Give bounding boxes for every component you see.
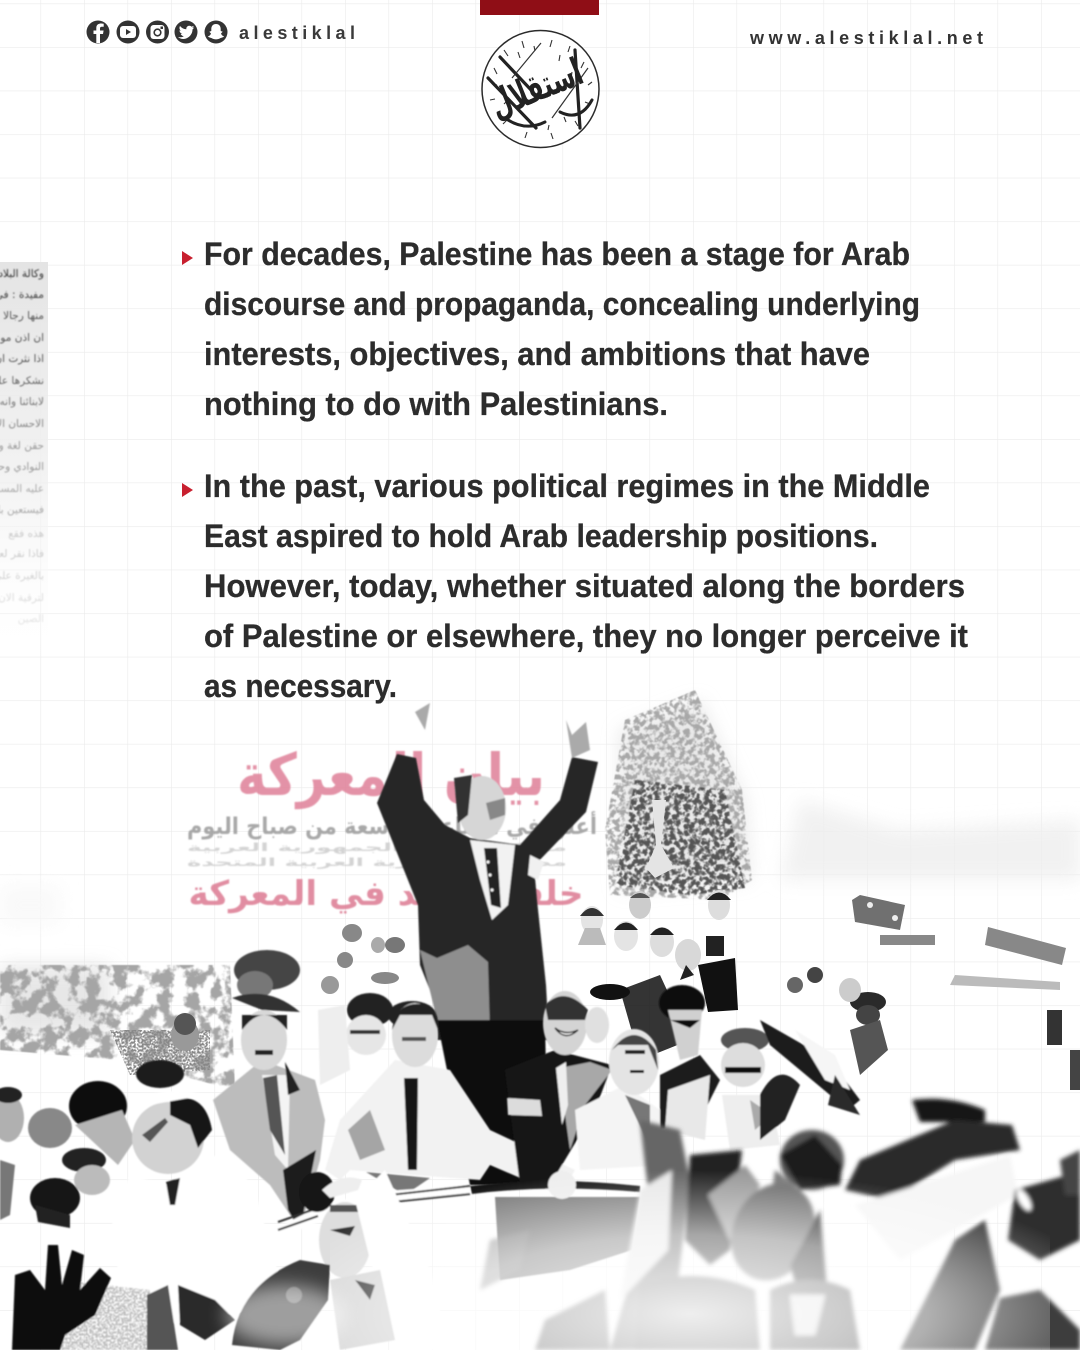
beret soldier looking up bbox=[299, 1170, 450, 1350]
newspaper headline: pink and grey Arabic: مصدر الجمهورية العربية المتحدة bbox=[187, 856, 567, 869]
grey crowd background left bbox=[0, 965, 235, 1090]
paragraph 2 bbox=[204, 468, 968, 704]
paragraph 1: For decades, Palestine has been a stage for Arab bbox=[204, 236, 910, 272]
bullet marker 1 bbox=[182, 251, 193, 265]
background haze bbox=[0, 700, 1080, 1035]
newspaper clipping strip: ان اذن مو bbox=[0, 332, 44, 344]
fog glow spot left bbox=[225, 1285, 345, 1345]
newspaper headline: pink and grey Arabic bbox=[187, 741, 597, 914]
raised arms and dark masses right bbox=[480, 1099, 1080, 1350]
website address: www.alestiklal.net bbox=[749, 28, 983, 48]
newspaper clipping strip: منها رجالا bbox=[3, 310, 44, 322]
newspaper headline: pink and grey Arabic: خلف القائد في المعركة bbox=[188, 874, 584, 914]
men behind bbox=[318, 993, 436, 1085]
man with striped tie bbox=[213, 1010, 325, 1230]
curly haired man and raised hands bbox=[665, 1020, 860, 1150]
paragraph 2: In the past, various political regimes in the Middle bbox=[204, 468, 930, 504]
logo: calligraphic seal: استقلال bbox=[483, 50, 589, 126]
bottom fog overlay bbox=[330, 1110, 1050, 1350]
newspaper headline: pink and grey Arabic: بيان المعركة bbox=[237, 741, 545, 810]
paragraph 1: interests, objectives, and ambitions that have bbox=[204, 336, 870, 372]
smiling man in dark suit bbox=[505, 991, 612, 1185]
newspaper clipping strip: هذه فقع bbox=[8, 528, 44, 540]
central man with raised arms bbox=[377, 703, 598, 1185]
icon: instagram bbox=[146, 20, 169, 44]
icon: facebook bbox=[86, 20, 110, 44]
paragraph 2: East aspired to hold Arab leadership positions. bbox=[204, 518, 878, 554]
logo: calligraphic seal bbox=[482, 30, 599, 148]
newspaper clipping strip bbox=[0, 262, 48, 662]
bullet marker 2 bbox=[182, 483, 193, 497]
newspaper headline: pink and grey Arabic: معركة وجبهة الجمهورية العربية bbox=[187, 841, 567, 854]
brand name: alestiklal bbox=[239, 23, 355, 43]
newspaper clipping strip: الصين bbox=[18, 613, 44, 625]
social icons row bbox=[86, 20, 228, 44]
icon: raised black hand bbox=[12, 1245, 111, 1350]
bald man in light shirt bbox=[575, 1029, 668, 1170]
tree and lamp post bbox=[605, 690, 752, 900]
paragraph 2: of Palestine or elsewhere, they no longer perceive it bbox=[204, 618, 968, 654]
distant crowd bbox=[110, 890, 1080, 1090]
icon: snapchat bbox=[204, 20, 228, 44]
paragraph 2: However, today, whether situated along the borders bbox=[204, 568, 965, 604]
paragraph 1 bbox=[204, 236, 920, 422]
top red bar bbox=[480, 0, 599, 15]
icon: youtube bbox=[116, 20, 140, 44]
left group with black hair bbox=[0, 1060, 184, 1228]
suit pieces bottom left bbox=[147, 1285, 235, 1350]
big man in white suit bbox=[110, 1091, 280, 1330]
front row men bbox=[0, 950, 860, 1350]
bottom left grey ground bbox=[40, 1280, 150, 1350]
paragraph 2: as necessary. bbox=[204, 668, 397, 704]
paragraph 1: nothing to do with Palestinians. bbox=[204, 386, 668, 422]
dark haired man bbox=[659, 985, 720, 1130]
officer caps bbox=[232, 950, 300, 1012]
front beret bbox=[232, 1260, 330, 1350]
photo collage: crowd and leader bbox=[0, 690, 1080, 1350]
newspaper headline: pink and grey Arabic: أعلن في الساعة التاسعة من صباح اليوم bbox=[187, 810, 597, 840]
paragraph 1: discourse and propaganda, concealing underlying bbox=[204, 286, 920, 322]
white suit man bbox=[325, 1003, 575, 1195]
icon: twitter bbox=[174, 20, 198, 44]
car rim and body bbox=[275, 1171, 640, 1280]
newspaper clipping strip: لابنائنا وانه bbox=[0, 396, 44, 408]
